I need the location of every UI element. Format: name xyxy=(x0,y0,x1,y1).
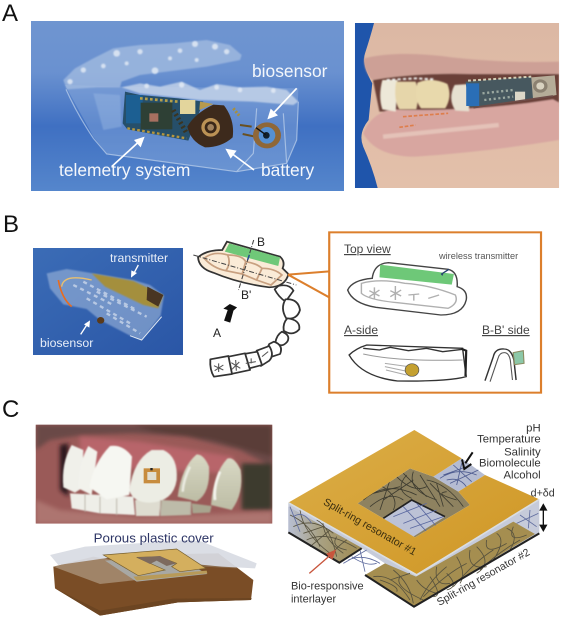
headings: view titles xyxy=(344,242,530,337)
arrows: pointers xyxy=(81,265,138,334)
arrow: A view direction xyxy=(223,304,237,323)
label: analyte list: Alcohol xyxy=(504,469,541,481)
label: interlayer: interlayer xyxy=(291,594,337,606)
detail: wires and sensor xyxy=(58,278,162,340)
icon: circuit on tooth xyxy=(465,75,557,108)
arrows: pointers from labels xyxy=(112,88,297,170)
arrow: analyte pointer xyxy=(462,452,473,469)
icon: B-B' cross section xyxy=(485,349,524,382)
icon: gold top layer xyxy=(288,430,539,574)
labels: photo annotations: transmitter xyxy=(110,251,168,265)
icon: center opening xyxy=(383,500,445,537)
diagram: B dental arch xyxy=(193,235,300,377)
mouth interior xyxy=(373,74,559,112)
icon: telemetry circuit board xyxy=(123,92,203,141)
headings: view titles: B-B' side xyxy=(482,323,530,337)
side faces xyxy=(288,499,539,607)
icon: upper molars with transmitter xyxy=(193,240,296,290)
label: interlayer xyxy=(291,580,364,606)
icon: top view tooth outline xyxy=(348,263,466,315)
lower lip xyxy=(363,99,559,157)
label: gap thickness: d+δd xyxy=(531,488,555,500)
label: resonator #1: Split-ring resonator #1 xyxy=(321,496,418,558)
icon: teeth xyxy=(63,445,241,516)
labels: photo annotations: biosensor xyxy=(252,61,328,81)
labels: photo annotations: battery xyxy=(261,160,314,180)
labels: photo annotations xyxy=(59,61,328,180)
red lip highlight xyxy=(399,113,448,127)
labels: section marks: B xyxy=(257,235,265,249)
label: resonator #2: Split-ring resonator #2 xyxy=(435,547,532,609)
label: analyte list xyxy=(477,423,541,481)
icon: lower layer left face xyxy=(288,507,363,563)
icon: tooth base block xyxy=(53,553,253,616)
label: analyte list: Biomolecule xyxy=(479,458,541,470)
heading: panel B letter: B xyxy=(3,211,19,238)
arrow: thickness xyxy=(540,505,546,531)
heading: panel A letter: A xyxy=(2,0,18,27)
icon: resonator layers xyxy=(105,557,207,582)
headings: view titles: A-side xyxy=(344,323,378,337)
panel: B photo of transmitter device xyxy=(33,248,183,355)
labels: photo annotations: biosensor xyxy=(40,336,93,350)
label: analyte list: Temperature xyxy=(477,433,541,445)
icon: fibre zone around opening xyxy=(358,468,470,537)
panel: A left photo of mouthguard xyxy=(31,21,344,191)
icon: A-side view xyxy=(349,345,466,381)
labels: section marks: B' xyxy=(241,288,251,302)
label: Porous plastic cover: Porous plastic cover xyxy=(94,530,214,545)
diagram: C split-ring resonator xyxy=(288,423,555,609)
icon: plastic cover sheet xyxy=(50,540,257,568)
icon: lower teeth arch xyxy=(210,285,300,377)
labels: section marks: A xyxy=(213,326,221,340)
label: interlayer: Bio-responsive xyxy=(291,580,364,592)
heading: panel C letter: C xyxy=(2,396,19,423)
panel: C porous plastic cover illustration xyxy=(50,530,257,616)
icon: clear device xyxy=(47,269,164,340)
upper lip xyxy=(364,54,559,80)
icon: fibre network xyxy=(290,510,527,603)
bottom dark edge xyxy=(288,532,539,607)
callout: orange detail box xyxy=(288,232,541,393)
panel: C photo of sensor on tooth xyxy=(36,425,272,524)
headings: view titles: Top view xyxy=(344,242,391,256)
icon: biosensor disc xyxy=(240,122,281,148)
icon: gold sensor on tooth xyxy=(144,468,160,483)
icon: resonator #2 lower layer xyxy=(365,522,535,607)
labels: photo annotations xyxy=(40,251,168,350)
labels: photo annotations: telemetry system xyxy=(59,160,190,180)
face skin xyxy=(361,23,559,188)
arrow: interlayer pointer xyxy=(309,551,335,573)
icon: gap with fibres xyxy=(433,458,485,492)
label: wireless transmitter: wireless transmitter xyxy=(438,251,518,261)
label: analyte list: Salinity xyxy=(504,446,541,458)
icon: teeth xyxy=(380,78,469,112)
label: analyte list: pH xyxy=(526,423,541,435)
panel: A right photo of device worn in mouth xyxy=(355,23,559,188)
icon: battery xyxy=(187,102,240,147)
labels: section marks xyxy=(213,235,265,340)
icon: clear mouthguard xyxy=(63,40,298,172)
